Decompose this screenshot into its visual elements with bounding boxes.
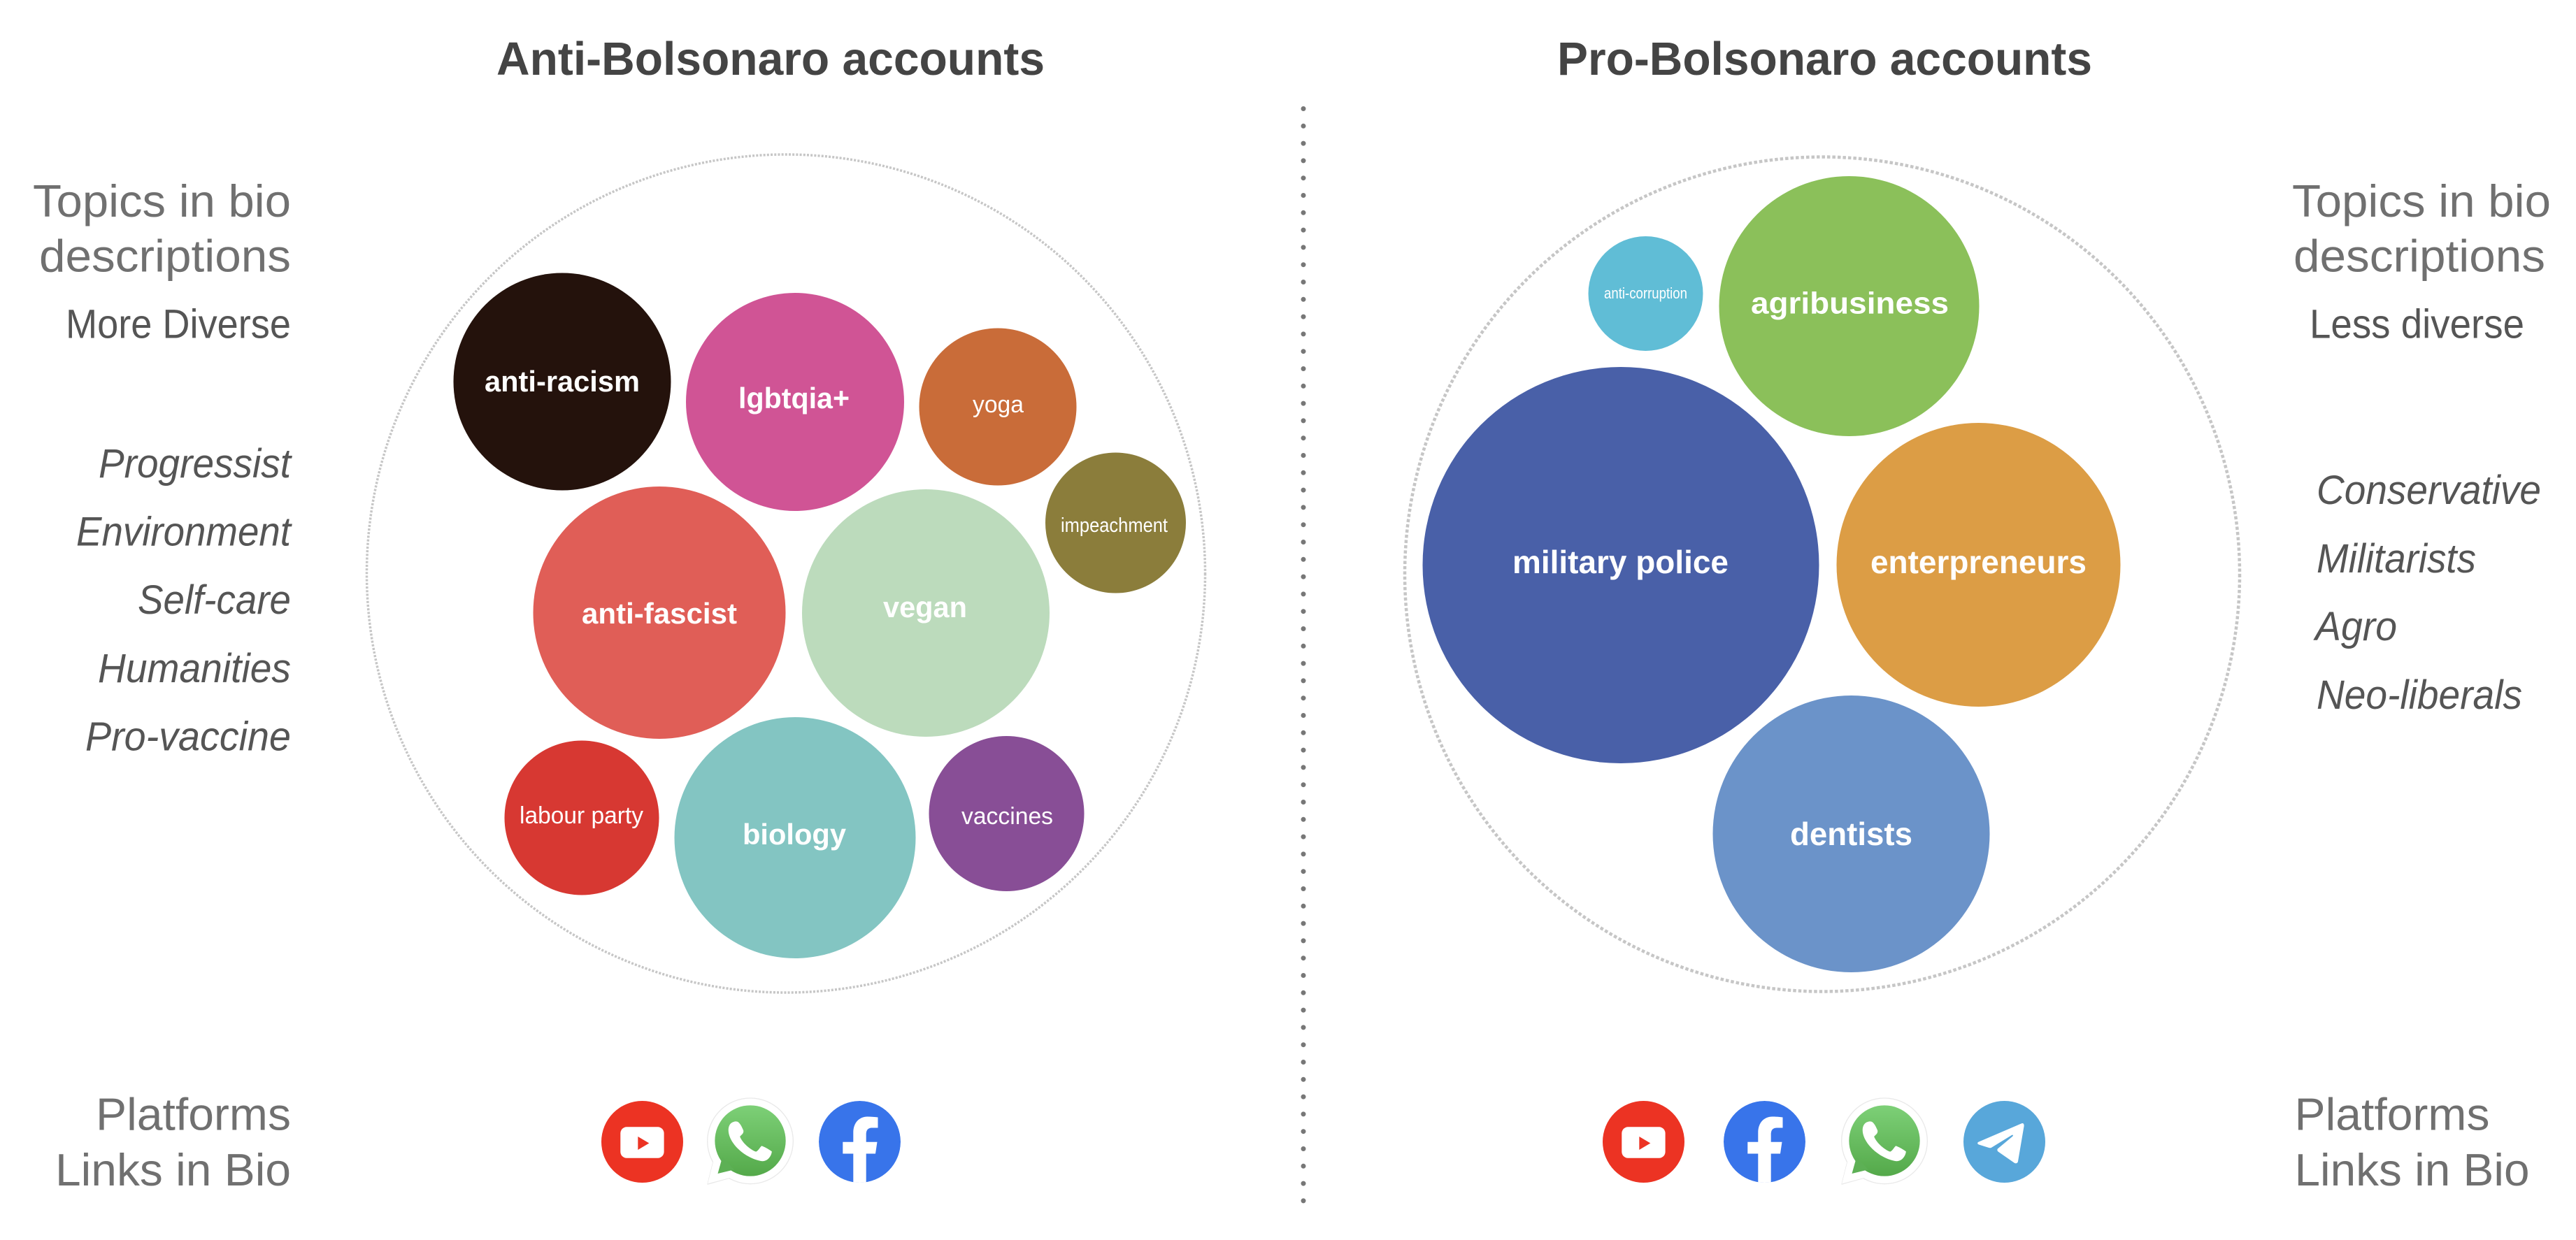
heading: platforms links in bio (left): Links in Bio	[55, 1144, 291, 1195]
heading: platforms links in bio (left)	[55, 1089, 291, 1195]
icon: YouTube	[1603, 1101, 1684, 1183]
bubble: lgbtqia+	[686, 293, 904, 511]
panel: pro-Bolsonaro bubble chart	[1405, 157, 2240, 991]
list: pro-Bolsonaro themes: Militarists	[2317, 536, 2476, 582]
heading: platforms links in bio (right)	[2295, 1089, 2530, 1195]
bubble: enterpreneurs: enterpreneurs	[1870, 544, 2087, 580]
bubble: vaccines	[929, 736, 1084, 891]
icon: WhatsApp	[1841, 1097, 1928, 1184]
heading: topics in bio descriptions (left)	[33, 175, 291, 281]
list: anti-Bolsonaro themes	[76, 441, 293, 759]
text: more diverse: More Diverse	[66, 302, 291, 347]
bubble: enterpreneurs	[1836, 423, 2120, 707]
list: pro-Bolsonaro themes	[2313, 468, 2541, 718]
list: pro-Bolsonaro themes: Conservative	[2317, 468, 2541, 513]
list: anti-Bolsonaro themes: Self-care	[138, 577, 291, 623]
bubble: impeachment: impeachment	[1061, 514, 1168, 537]
heading: topics in bio descriptions (left): Topics in bio	[33, 175, 291, 226]
list: pro-Bolsonaro themes: Agro	[2313, 604, 2397, 649]
bubble: anti-fascist	[533, 486, 786, 739]
list: anti-Bolsonaro themes: Environment	[76, 509, 293, 555]
bubble: agribusiness: agribusiness	[1751, 287, 1949, 320]
list: anti-Bolsonaro themes: Progressist	[99, 441, 293, 486]
list: anti-Bolsonaro themes: Pro-vaccine	[85, 714, 291, 759]
bubble: labour party	[505, 741, 659, 895]
panel: right text column	[2292, 175, 2551, 1195]
bubble: dentists	[1713, 695, 1990, 972]
title: Anti-Bolsonaro accounts: Anti-Bolsonaro accounts	[496, 33, 1045, 85]
icon: Facebook	[1724, 1101, 1805, 1184]
bubble: anti-racism: anti-racism	[485, 365, 640, 398]
heading: platforms links in bio (right): Platforms	[2295, 1089, 2489, 1139]
panel: pro-Bolsonaro platform icons	[1603, 1097, 2045, 1184]
icon: WhatsApp	[707, 1097, 794, 1184]
bubble: biology	[674, 717, 916, 958]
bubble: biology: biology	[743, 818, 847, 851]
text: less diverse: Less diverse	[2310, 302, 2524, 347]
bubble: anti-fascist: anti-fascist	[582, 597, 737, 630]
bubble: vaccines: vaccines	[961, 803, 1053, 830]
panel: left text column	[33, 175, 293, 1195]
list: pro-Bolsonaro themes: Neo-liberals	[2317, 672, 2522, 718]
bubble: military police	[1422, 367, 1819, 763]
heading: topics in bio descriptions (right): Topics in bio	[2292, 175, 2551, 226]
outer dotted circle	[366, 154, 1205, 993]
heading: topics in bio descriptions (left): descriptions	[39, 231, 291, 281]
bubble: yoga: yoga	[973, 391, 1024, 418]
bubble: agribusiness	[1719, 176, 1979, 436]
heading: platforms links in bio (left): Platforms	[96, 1089, 291, 1139]
bubble: labour party: labour party	[520, 802, 643, 829]
outer dotted circle	[1405, 157, 2240, 991]
icon: Facebook	[819, 1101, 901, 1184]
bubble: anti-corruption	[1589, 236, 1703, 351]
bubble: anti-racism	[453, 273, 671, 491]
bubble: vegan: vegan	[883, 591, 967, 623]
panel: anti-Bolsonaro platform icons	[601, 1097, 901, 1184]
list: anti-Bolsonaro themes: Humanities	[98, 646, 291, 691]
heading: topics in bio descriptions (right): descriptions	[2294, 231, 2545, 281]
icon: YouTube	[601, 1101, 683, 1183]
bubble: anti-corruption: anti-corruption	[1604, 284, 1687, 302]
bubble: yoga	[919, 329, 1077, 485]
heading: topics in bio descriptions (right)	[2292, 175, 2551, 281]
icon: Telegram	[1963, 1101, 2045, 1183]
bubble: impeachment	[1045, 453, 1186, 593]
bubble: dentists: dentists	[1790, 816, 1912, 852]
bubble: military police: military police	[1512, 544, 1729, 580]
bubble: vegan	[802, 489, 1050, 737]
panel: anti-Bolsonaro bubble chart	[366, 154, 1205, 993]
dotted divider between panels	[1301, 109, 1306, 1202]
bubble: lgbtqia+: lgbtqia+	[738, 382, 850, 414]
heading: platforms links in bio (right): Links in Bio	[2295, 1144, 2530, 1195]
title: Pro-Bolsonaro accounts: Pro-Bolsonaro accounts	[1557, 33, 2092, 85]
